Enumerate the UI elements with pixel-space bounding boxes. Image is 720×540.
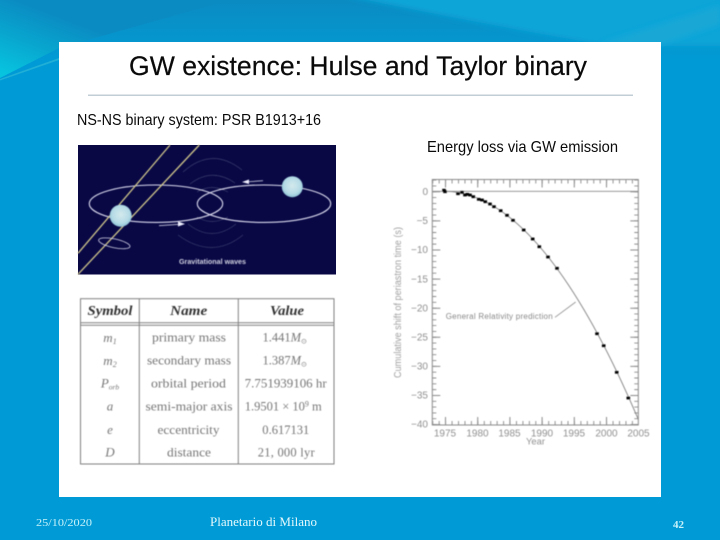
title underline [88, 94, 633, 96]
symbol column: e [107, 422, 113, 437]
x axis numbers: 2005 [627, 428, 650, 440]
symbol column: 1 [113, 337, 117, 346]
prediction curve [444, 191, 638, 419]
white content panel [59, 42, 661, 497]
plot frame and ticks [432, 180, 638, 425]
x axis numbers: 1975 [434, 428, 457, 440]
neutron star right [282, 176, 303, 197]
name column [146, 331, 233, 460]
data points [442, 189, 630, 399]
value column: m [309, 399, 322, 413]
name column: secondary mass [147, 354, 231, 368]
x axis numbers: 1985 [498, 428, 521, 440]
table header: Value [270, 303, 304, 318]
footer page number: 42 [673, 519, 684, 531]
table header: Symbol [88, 303, 133, 318]
y axis numbers [411, 187, 428, 430]
y axis numbers: −25 [411, 332, 428, 344]
y axis numbers: −30 [411, 362, 428, 372]
y axis numbers: −35 [411, 390, 428, 402]
name column: distance [167, 446, 211, 460]
subheading: energy loss: Energy loss via GW emission [427, 139, 618, 156]
prediction label [446, 302, 576, 321]
y axis numbers: −15 [411, 274, 428, 286]
x axis title: Year [526, 436, 545, 446]
y axis numbers: −5 [417, 216, 428, 227]
value column: 0.617131 [262, 423, 309, 437]
x axis numbers: 1995 [563, 428, 586, 440]
periastron shift chart [393, 180, 650, 446]
value column: 7.751939106 hr [245, 376, 328, 390]
x axis numbers: 2000 [595, 428, 618, 440]
y axis numbers: 0 [422, 187, 428, 198]
symbol column: D [104, 445, 115, 460]
prediction label: General Relativity prediction [446, 312, 553, 321]
name column: primary mass [152, 331, 226, 345]
symbol column: orb [109, 382, 119, 392]
y axis numbers: −40 [411, 420, 428, 430]
table header: Name [169, 303, 207, 318]
name column: eccentricity [158, 423, 220, 437]
diagram caption: Gravitational waves [179, 259, 246, 266]
parameters table [80, 299, 334, 464]
value column [245, 331, 328, 460]
orbit diagram [78, 145, 336, 274]
symbol column [100, 330, 119, 460]
symbol column: a [107, 398, 114, 413]
orbits [89, 185, 331, 222]
footer venue: Planetario di Milano [210, 514, 317, 529]
symbol column: P [101, 376, 109, 390]
title: GW existence: Hulse and Taylor binary [129, 51, 587, 81]
footer date: 25/10/2020 [36, 517, 93, 529]
value column: 1.441M [262, 331, 301, 345]
y axis title: Cumulative shift of periastron time (s) [393, 227, 404, 378]
spin ellipse [98, 236, 131, 251]
neutron star left [110, 205, 132, 227]
value column: 1.387M [262, 354, 301, 368]
symbol column: m [103, 330, 113, 345]
symbol column: m [103, 353, 113, 368]
y axis numbers: −10 [411, 245, 428, 256]
symbol column: 2 [113, 360, 117, 369]
value column: ⊙ [301, 361, 307, 369]
subheading: binary system: NS-NS binary system: PSR B1913+16 [77, 112, 321, 129]
gravitational wave beams [78, 145, 199, 274]
orbit arrows [159, 180, 263, 226]
table header [88, 303, 304, 318]
x axis numbers [434, 428, 650, 440]
x axis numbers: 1980 [466, 428, 489, 440]
value column: ⊙ [301, 338, 307, 346]
value column: 1.9501 × 10 [245, 399, 305, 413]
value column: 9 [305, 399, 309, 408]
y axis numbers: −20 [411, 304, 428, 314]
name column: semi-major axis [146, 399, 233, 413]
gravitational wave arcs [178, 158, 243, 248]
value column: 21, 000 lyr [258, 446, 316, 460]
x axis numbers: 1990 [531, 428, 554, 440]
name column: orbital period [151, 376, 227, 390]
